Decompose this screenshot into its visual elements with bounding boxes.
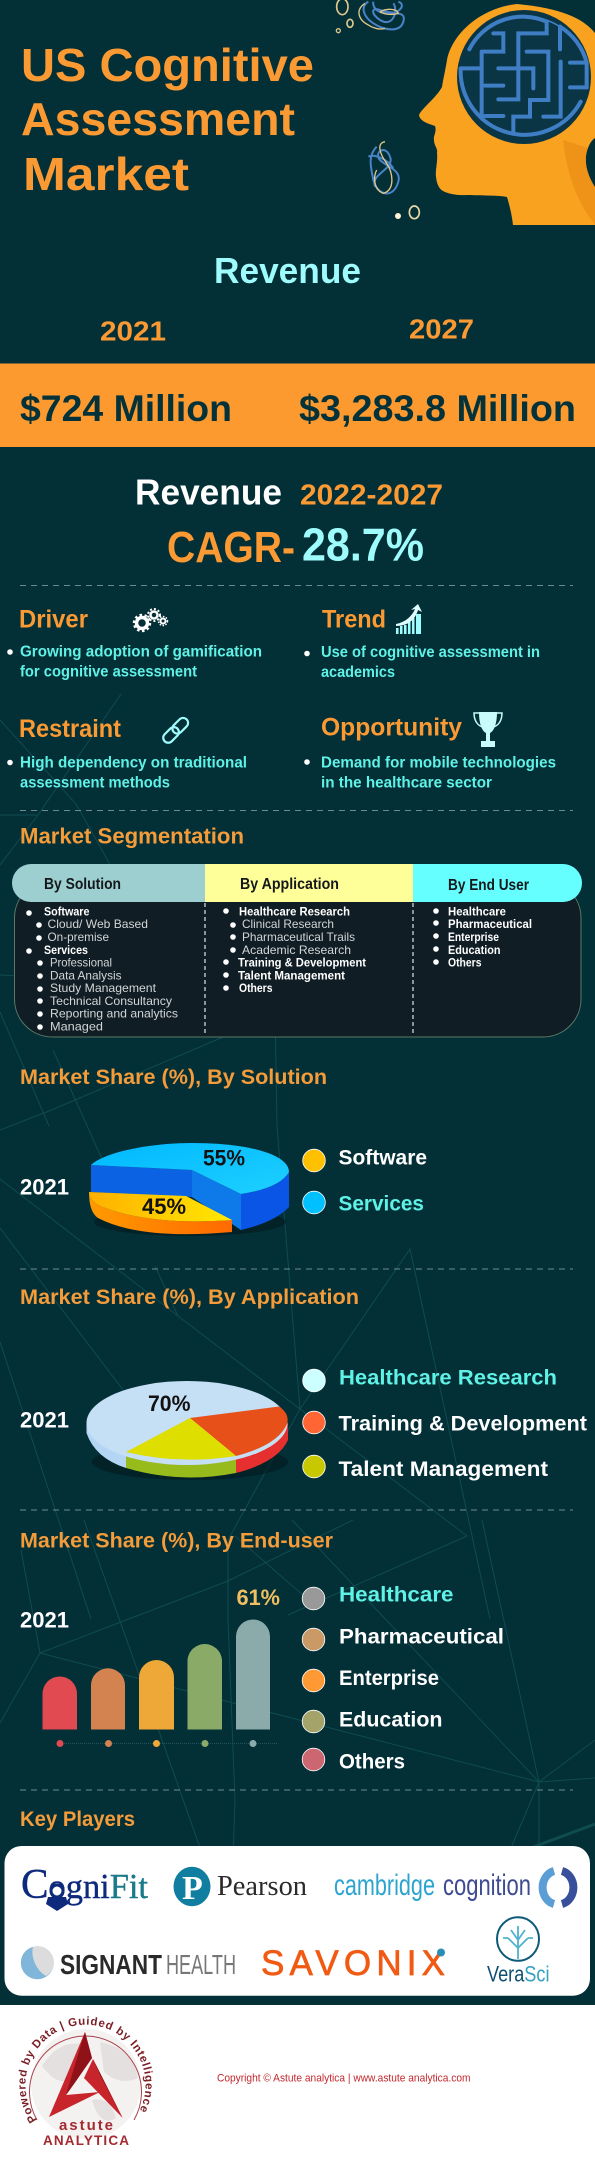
chart: end-user bars	[42, 1585, 280, 1747]
panel: segmentation table: Others	[239, 981, 273, 995]
logo: CogniFit: CogniFit	[21, 1862, 148, 1908]
panel: segmentation table: Education	[448, 943, 500, 957]
logo: cambridge cognition: cognition	[443, 1869, 531, 1902]
panel: segmentation table: By Solution	[44, 876, 121, 893]
year label: 2021	[20, 1608, 69, 1632]
title	[21, 39, 314, 200]
revenue band: $3,283.8 Million	[299, 388, 576, 429]
panel: segmentation table: Clinical Research	[242, 917, 334, 931]
panel: driver: Growing adoption of gamification	[20, 644, 262, 660]
heading: share by end-user: Market Share (%), By End-user	[20, 1530, 333, 1552]
legend: solution: Services	[338, 1192, 424, 1216]
year 2021: 2021	[100, 316, 166, 346]
heading: revenue: Revenue	[214, 250, 361, 291]
panel: segmentation table: By End User	[448, 877, 529, 894]
heading: share by solution: Market Share (%), By Solution	[20, 1066, 327, 1089]
revenue band	[0, 364, 595, 447]
panel: segmentation table: Pharmaceutical Trails	[242, 930, 355, 944]
panel: restraint: High dependency on traditional	[20, 754, 247, 772]
panel: segmentation table: Talent Management	[238, 968, 345, 982]
panel: trend: Use of cognitive assessment in	[321, 644, 540, 661]
heading: market segmentation: Market Segmentation	[20, 824, 244, 848]
panel: restraint: assessment methods	[20, 774, 170, 792]
logo: Pearson	[174, 1867, 307, 1907]
logo: VeraSci	[487, 1917, 550, 1986]
panel: segmentation table: Enterprise	[448, 930, 499, 944]
logo: cambridge cognition: cambridge	[334, 1869, 435, 1902]
panel: segmentation table: Professional	[50, 956, 112, 970]
year label: 2021	[20, 1174, 69, 1200]
title: Market	[23, 148, 189, 200]
panel: segmentation table: Healthcare Research	[239, 904, 350, 918]
panel: opportunity: Opportunity	[321, 714, 462, 742]
legend: solution: Software	[338, 1146, 427, 1170]
panel: segmentation table: Reporting and analytics	[50, 1006, 178, 1020]
logo: cambridge cognition	[334, 1869, 573, 1904]
chart: end-user bars: 61%	[236, 1585, 280, 1610]
CAGR callout: 2022-2027	[300, 480, 443, 512]
legend: application: Training & Development	[338, 1412, 587, 1436]
revenue band: $724 Million	[20, 388, 232, 429]
panel: segmentation table: Healthcare	[448, 904, 506, 918]
illustration: head with maze	[419, 4, 595, 225]
panel: driver	[7, 606, 262, 680]
title: US Cognitive	[21, 39, 314, 91]
legend: application: Healthcare Research	[339, 1366, 557, 1390]
title: Assessment	[21, 93, 295, 145]
chart: solution pie: 55%	[203, 1146, 245, 1170]
panel: opportunity: Demand for mobile technologies	[321, 754, 556, 772]
year label: 2021	[20, 1408, 69, 1432]
panel: segmentation table: Others	[448, 956, 482, 970]
copyright: Copyright © Astute analytica | www.astute analytica.com	[217, 2072, 470, 2084]
panel: opportunity: in the healthcare sector	[321, 774, 492, 792]
panel: driver: for cognitive assessment	[20, 664, 197, 680]
legend: end-user: Healthcare	[339, 1584, 454, 1606]
panel: segmentation table	[12, 864, 582, 1037]
chart: solution pie: 45%	[142, 1194, 186, 1219]
logo: Savonix: SAVONIX	[261, 1944, 445, 1983]
panel: segmentation table: Managed	[50, 1020, 103, 1034]
logo: VeraSci: VeraSci	[487, 1962, 550, 1986]
chart: application pie: 70%	[148, 1391, 190, 1416]
legend: application: Talent Management	[338, 1458, 548, 1481]
CAGR callout: Revenue	[135, 472, 282, 512]
panel: segmentation table: Software	[44, 904, 90, 918]
panel: opportunity	[304, 712, 556, 792]
legend: solution	[303, 1146, 427, 1216]
icon: thought scribbles	[336, 0, 419, 219]
panel: trend	[304, 604, 540, 681]
panel: segmentation table: Services	[44, 943, 88, 957]
panel: segmentation table: Study Management	[50, 981, 157, 995]
heading: share by application: Market Share (%), By Application	[20, 1286, 359, 1309]
legend: end-user: Enterprise	[339, 1667, 439, 1690]
panel: restraint	[7, 715, 247, 792]
heading: key players: Key Players	[20, 1808, 135, 1831]
panel: segmentation table: Technical Consultancy	[50, 994, 172, 1008]
legend: application	[303, 1366, 587, 1481]
panel: restraint: Restraint	[19, 715, 122, 743]
year 2027: 2027	[409, 314, 474, 344]
chart: solution pie	[89, 1143, 289, 1236]
panel: driver: Driver	[19, 606, 88, 634]
legend: end-user: Others	[339, 1750, 405, 1774]
panel: segmentation table: On-premise	[48, 930, 109, 944]
panel: segmentation table: Training & Development	[238, 956, 366, 970]
logo: Signant Health	[21, 1946, 236, 1980]
logo: Astute Analytica: Powered by Data | Guided by Intelligence	[18, 2016, 153, 2124]
legend: end-user	[302, 1584, 504, 1774]
CAGR callout	[135, 472, 443, 572]
panel: segmentation table: Academic Research	[242, 943, 351, 957]
legend: end-user: Pharmaceutical	[339, 1626, 504, 1648]
logo: Signant Health: SIGNANT	[60, 1949, 162, 1980]
logo: Astute Analytica: ANALYTICA	[43, 2133, 129, 2148]
chart: application pie	[86, 1381, 288, 1480]
logo: Signant Health: HEALTH	[166, 1949, 236, 1980]
logo: Pearson: P	[182, 1870, 203, 1907]
logo: Astute Analytica: astute	[59, 2117, 113, 2134]
panel: segmentation table: Pharmaceutical	[448, 917, 532, 931]
panel: segmentation table: Data Analysis	[50, 968, 122, 982]
legend: end-user: Education	[339, 1708, 442, 1732]
panel: segmentation table: By Application	[240, 876, 339, 893]
panel: segmentation table: Cloud/ Web Based	[48, 917, 148, 931]
panel: key player logos	[4, 1846, 590, 1996]
panel: trend: Trend	[322, 606, 386, 634]
logo: Pearson: Pearson	[217, 1870, 307, 1902]
CAGR callout: 28.7%	[302, 518, 424, 570]
panel: trend: academics	[321, 664, 395, 681]
CAGR callout: CAGR-	[167, 523, 295, 572]
